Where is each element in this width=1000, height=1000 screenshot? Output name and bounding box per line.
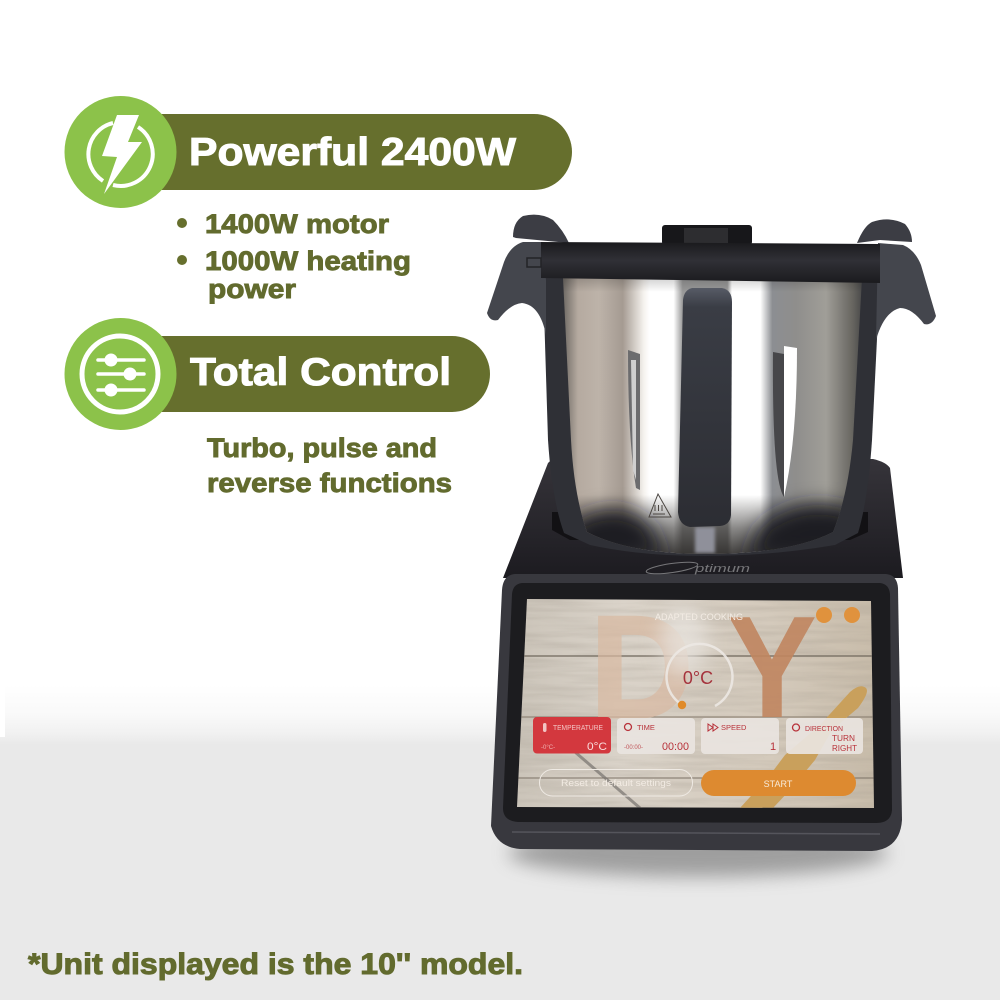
machine base body bbox=[503, 459, 903, 578]
bezel lower highlight bbox=[512, 832, 880, 834]
header bar: total control bbox=[118, 336, 490, 412]
card: temperature: 0°C bbox=[587, 741, 607, 753]
wood plank gaps bbox=[518, 656, 876, 778]
left handle bbox=[487, 242, 546, 335]
left slot highlight bbox=[631, 360, 636, 480]
card: direction: TURN bbox=[832, 733, 855, 743]
card: speed: 1 bbox=[770, 741, 776, 753]
right handle bbox=[876, 243, 936, 340]
wood grain texture bbox=[515, 598, 877, 810]
card: direction: DIRECTION bbox=[805, 724, 843, 733]
steel bowl body bbox=[563, 278, 862, 554]
card: direction: RIGHT bbox=[832, 743, 857, 753]
reset button bbox=[540, 770, 692, 796]
text: control functions bbox=[207, 433, 452, 498]
icon: sliders in a circle bbox=[64, 318, 176, 430]
bowl side bands bbox=[543, 278, 880, 556]
machine shadow on the surface bbox=[508, 829, 888, 877]
rim band bbox=[541, 242, 880, 283]
bowl vertical shading bbox=[563, 278, 862, 554]
screen surround bbox=[503, 583, 892, 823]
text: control functions: reverse functions bbox=[207, 468, 452, 498]
bullet list: power: 1400W motor bbox=[205, 209, 390, 239]
text: control functions: Turbo, pulse and bbox=[207, 433, 437, 463]
bowl bbox=[487, 215, 936, 560]
heading: Powerful 2400W bbox=[189, 131, 516, 174]
card: time: TIME bbox=[637, 723, 655, 732]
card: temperature bbox=[533, 717, 611, 754]
lid knob bbox=[662, 225, 752, 245]
temperature dial: 0°C bbox=[683, 668, 713, 688]
bullet list: power: 1000W heating bbox=[205, 246, 411, 276]
screen wood background bbox=[515, 598, 877, 810]
bullet list: power: power bbox=[208, 274, 297, 304]
card: speed bbox=[701, 718, 779, 754]
brand logo bbox=[646, 560, 750, 576]
adapted cooking title: ADAPTED COOKING bbox=[655, 612, 743, 622]
product: kitchen machine bbox=[487, 215, 936, 851]
right inner slot bbox=[773, 352, 784, 497]
left upper lip bbox=[513, 215, 569, 243]
bowl bottom shading bbox=[570, 505, 860, 560]
touch screen bbox=[515, 586, 877, 810]
DIY letter D: D bbox=[590, 586, 693, 748]
heading: Total Control bbox=[190, 351, 451, 394]
DIY letter Y: Y bbox=[727, 586, 817, 748]
start button: START bbox=[764, 779, 793, 789]
brand logo: ptimum bbox=[693, 563, 750, 575]
icon: lightning in a circle bbox=[64, 96, 176, 208]
right upper lip bbox=[857, 219, 912, 243]
side clip bbox=[527, 258, 541, 267]
rolling pin bbox=[740, 686, 867, 808]
front panel bezel bbox=[491, 574, 902, 851]
bowl seat opening bbox=[552, 512, 868, 540]
reset button: Reset to default settings bbox=[561, 778, 671, 789]
header bar: powerful 2400W bbox=[118, 114, 572, 190]
orange round buttons bbox=[816, 607, 860, 623]
right slot highlight bbox=[784, 346, 797, 497]
card: direction bbox=[786, 718, 863, 754]
bullet list: power bbox=[177, 209, 411, 304]
card: time bbox=[617, 718, 695, 754]
card: temperature: TEMPERATURE bbox=[553, 723, 603, 732]
footnote: *Unit displayed is the 10'' model. bbox=[28, 948, 523, 981]
knife bbox=[575, 752, 640, 808]
left inner slot bbox=[628, 350, 640, 490]
hot surface warning triangle bbox=[649, 494, 671, 517]
card: speed: SPEED bbox=[721, 723, 747, 732]
central handle bbox=[678, 288, 732, 527]
card: temperature: -0°C- bbox=[541, 745, 555, 751]
temperature dial bbox=[667, 644, 733, 709]
card: time: 00:00 bbox=[662, 741, 689, 753]
mist over the letters bbox=[660, 604, 708, 676]
card: time: -00:00- bbox=[624, 745, 643, 751]
start button bbox=[701, 770, 856, 796]
